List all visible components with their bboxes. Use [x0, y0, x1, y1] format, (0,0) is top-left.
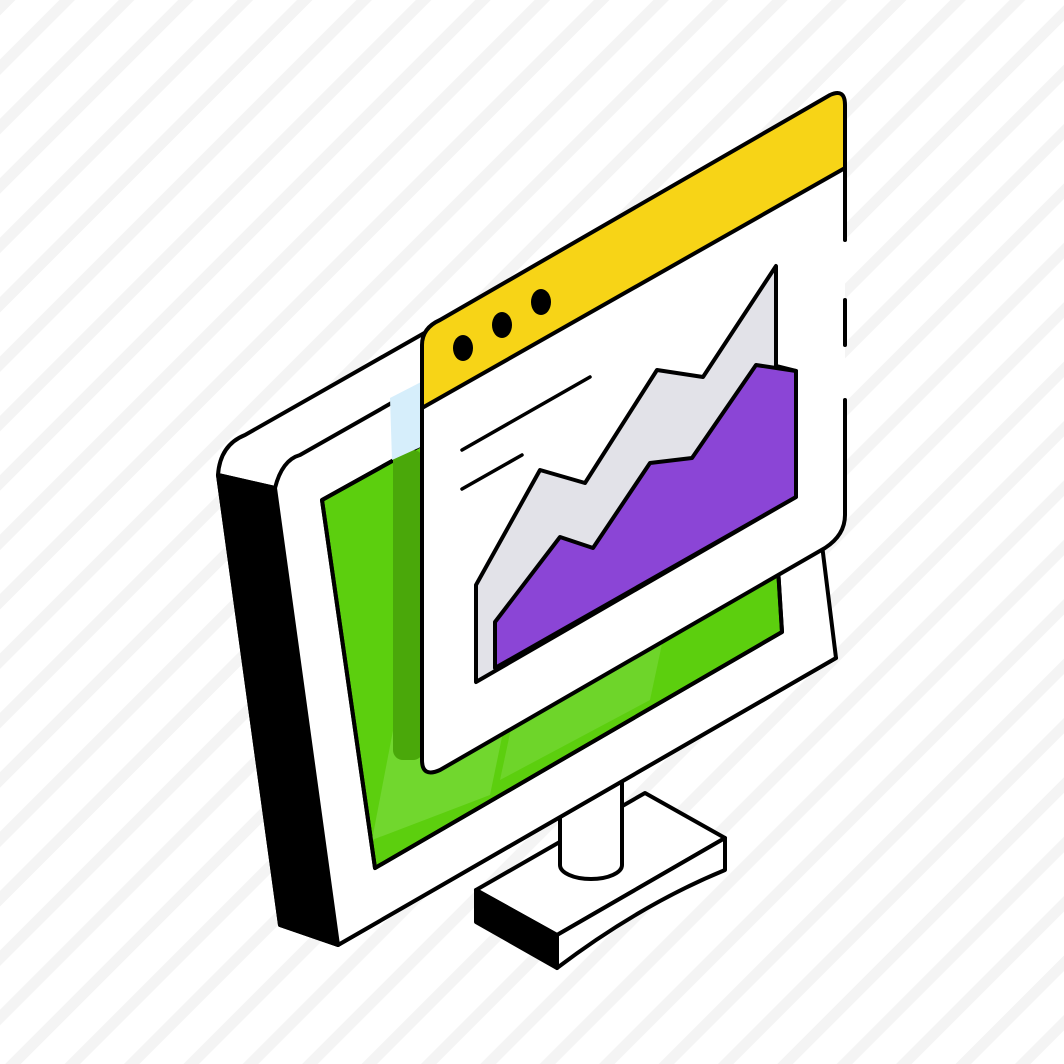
dots: [453, 289, 551, 361]
text lines: [462, 377, 590, 489]
chart gray: [476, 266, 796, 682]
yellow header: [422, 93, 845, 408]
green screen: [322, 380, 782, 868]
browser window: [422, 93, 845, 772]
chart purple: [495, 365, 796, 668]
stand: [476, 770, 725, 968]
monitor body: [218, 290, 836, 945]
